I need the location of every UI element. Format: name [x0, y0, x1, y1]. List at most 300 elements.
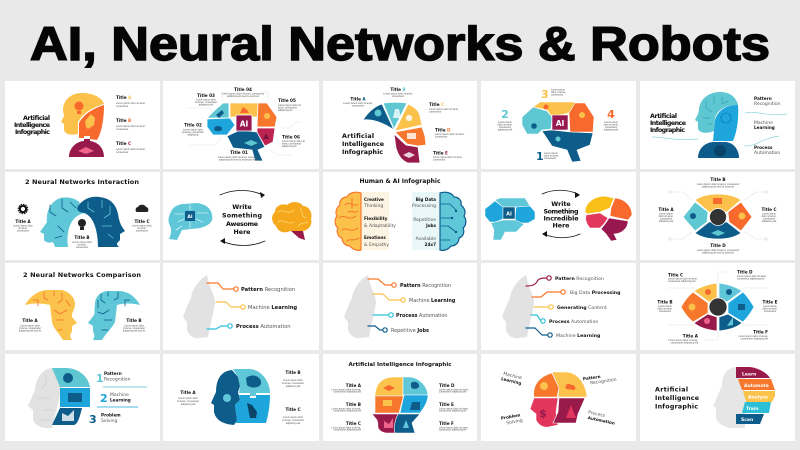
label: title B with bulb	[72, 219, 92, 249]
label: title C: consectetur	[763, 218, 775, 220]
label: title 04: adipiscing elit sed do eiusmod	[227, 95, 260, 98]
panel: four line head	[323, 263, 477, 350]
item 2	[100, 392, 131, 405]
six piece head	[372, 377, 428, 433]
label: title 01: Title 01	[230, 150, 248, 155]
cycle arrows	[220, 190, 265, 246]
label: title E: Lorem ipsum dolor sit amet,	[439, 408, 469, 410]
step 2	[497, 108, 513, 132]
head illustration	[28, 368, 90, 428]
eye diagram	[683, 194, 752, 239]
connector: machine	[526, 328, 552, 337]
label: title C: Title C	[116, 141, 131, 146]
AI chip label: AI	[240, 120, 248, 128]
heading	[14, 115, 50, 136]
label: repetitive jobs: Repetitive	[413, 217, 436, 223]
gray head	[344, 275, 376, 338]
label: title B: consectetur	[116, 128, 129, 131]
label: machine learning: Learning	[754, 125, 775, 130]
label: title A: Title A	[116, 95, 132, 100]
panel: head with three parts	[5, 81, 160, 169]
cyan head	[88, 291, 140, 340]
step 2: consectetur	[499, 126, 511, 129]
item 2: Learning	[110, 398, 131, 402]
label: emotions and empathy	[364, 235, 389, 248]
label: title A	[177, 390, 199, 406]
label: title C: dolor sit amet,	[761, 215, 777, 218]
AI chip label: AI	[506, 212, 512, 218]
panel: head with list bands	[640, 354, 795, 441]
panel: numbered head	[5, 354, 160, 441]
label: title B: Title B	[390, 87, 406, 92]
connector: machine	[373, 294, 405, 302]
label: process automation: Process Automation	[396, 313, 447, 319]
label: title E	[433, 150, 463, 162]
step 2: dolor sit amet,	[497, 124, 513, 126]
label: title F: Lorem ipsum dolor sit amet,	[738, 335, 768, 338]
label: machine learning: Learning	[501, 376, 522, 386]
label: title B	[282, 370, 304, 388]
label: title 02: sit amet, consectetur	[182, 131, 204, 134]
heading: 2 Neural Networks Comparison	[23, 271, 141, 279]
label: title 03: adipiscing elit	[199, 104, 214, 106]
center message: Write	[551, 201, 571, 208]
label: process automation	[754, 145, 780, 156]
label: title B: sit amet, consectetur	[123, 327, 145, 330]
step 3: 3	[541, 88, 549, 101]
item 2: Machine	[110, 392, 129, 398]
item 1	[96, 371, 131, 385]
label: title F: consectetur adipiscing elit	[741, 338, 768, 340]
label: title B: Title B	[346, 402, 361, 407]
label: title D	[697, 243, 739, 254]
label: problem solving: Solving	[506, 418, 523, 426]
label: title E: Title E	[763, 300, 778, 304]
label: title B	[332, 402, 361, 412]
label: title 05: Lorem ipsum dolor sit	[278, 104, 301, 107]
color segmented brain	[585, 196, 632, 241]
center message: Here	[234, 229, 250, 236]
label: title B: consectetur	[392, 95, 404, 98]
panel: four piece head with tilted labels	[481, 354, 636, 441]
step 1: consectetur	[544, 157, 557, 160]
step 1: 1	[536, 150, 544, 163]
center message	[222, 204, 262, 236]
label: title C with cloud: sit amet,	[137, 227, 147, 230]
label: big data processing: Processing	[412, 203, 436, 209]
label: pattern recognition: Pattern Recognition	[555, 276, 604, 282]
label: title 03: Lorem ipsum dolor	[196, 98, 216, 102]
label: title D: Title D	[439, 383, 455, 388]
label: title E: Title E	[433, 150, 448, 156]
item 3: 3	[89, 413, 97, 426]
label: title A	[116, 95, 146, 108]
AI segmented brain	[485, 198, 535, 240]
heading	[342, 133, 384, 156]
panel: fan head	[323, 81, 477, 169]
label: title D: Lorem ipsum dolor sit amet, consectetur	[697, 249, 739, 252]
item 2: 2	[100, 392, 108, 405]
band: learn	[736, 367, 770, 378]
band: analyze: Analyze	[748, 394, 768, 400]
heading: Artificial	[655, 386, 688, 394]
label: title F	[439, 421, 469, 432]
item 1: Pattern	[104, 371, 122, 376]
label: title 01	[218, 150, 260, 162]
label: title E	[439, 402, 469, 412]
label: process automation: Process	[754, 145, 773, 150]
label: title A: sit amet, consectetur	[19, 327, 41, 330]
label: title D	[439, 383, 469, 394]
label: title C: Title C	[285, 407, 301, 412]
label: title C: consectetur	[429, 110, 442, 114]
label: title B: consectetur	[659, 310, 671, 313]
label: title A: Title A	[180, 390, 196, 395]
label: pattern recognition: Recognition	[754, 101, 781, 107]
label: available 24x7	[416, 236, 436, 247]
step 3	[541, 88, 566, 101]
label: title C: consectetur adipiscing elit	[334, 428, 361, 432]
label: title B with bulb: Lorem ipsum dolor	[72, 241, 92, 244]
heading: 2 Neural Networks Interaction	[25, 178, 139, 186]
panel: 2 neural networks comparison	[5, 263, 160, 350]
label: title D: Lorem ipsum dolor sit amet,	[435, 133, 465, 136]
label: flexibility and adaptability: Flexibility	[364, 216, 388, 221]
label: title C with cloud: consectetur	[136, 230, 148, 232]
label: title A: Lorem ipsum dolor	[20, 324, 40, 328]
label: title 05: Title 05	[278, 98, 296, 103]
label: title D: consectetur adipiscing elit	[439, 390, 467, 394]
band: automate	[738, 379, 775, 390]
panel: write something incredible here	[481, 172, 636, 260]
label: title 04	[222, 87, 264, 98]
label: title C: Lorem ipsum dolor sit amet,	[116, 148, 146, 151]
label: process automation: Process	[588, 410, 606, 419]
label: title A: consectetur adipiscing elit	[334, 390, 361, 394]
label: title E: consectetur adipiscing elit	[439, 410, 467, 412]
label: title A: consectetur	[116, 105, 129, 108]
label: process automation: Process Automation	[549, 319, 598, 325]
connector: process	[207, 324, 232, 329]
label: pattern recognition	[754, 96, 781, 107]
puzzle head illustration	[211, 369, 270, 425]
label: title C: consectetur adipiscing elit	[668, 280, 696, 283]
label: title E	[762, 300, 778, 313]
label: title B: Title B	[285, 370, 301, 375]
label: title C: Title C	[761, 207, 777, 212]
title: AI, Neural Networks & Robots	[30, 17, 770, 70]
label: title B: adipiscing elit	[286, 385, 301, 388]
wave connectors	[652, 112, 787, 146]
label: title C: Title C	[668, 272, 683, 278]
label: title D: Title D	[737, 270, 753, 274]
label: title D: Title D	[435, 128, 451, 132]
label: title F: Lorem ipsum dolor sit amet,	[439, 426, 469, 430]
label: title A	[19, 318, 42, 332]
label: title A: adipiscing elit	[181, 403, 196, 406]
center message: Something	[222, 212, 262, 220]
label: machine learning: Machine Learning	[409, 298, 456, 304]
label: title C: Title C	[429, 102, 444, 107]
label: title B: Title B	[126, 318, 142, 323]
heading: Intelligence	[342, 141, 384, 148]
label: repetitive jobs: Jobs	[425, 223, 436, 228]
label: title C with cloud: Title C	[134, 219, 150, 224]
label: machine learning: Machine	[754, 120, 773, 126]
label: pattern recognition: Pattern	[754, 96, 772, 101]
label: title C	[668, 272, 698, 283]
connector: big data	[532, 290, 565, 297]
AI chip label: AI	[187, 214, 193, 220]
yellow head	[25, 290, 77, 340]
item 1: 1	[96, 372, 104, 385]
four piece head	[530, 372, 587, 427]
AI brain half	[440, 192, 466, 250]
label: title B: Title B	[116, 118, 131, 123]
label: machine learning	[501, 371, 523, 386]
label: title B	[383, 87, 413, 98]
label: title A with gear: Lorem ipsum dolor	[13, 224, 33, 228]
band: scan: Scan	[741, 417, 753, 423]
panel: teal head with wave lines	[640, 81, 795, 169]
panel: 2 neural networks interaction	[5, 172, 160, 260]
connector: generating	[534, 305, 553, 309]
label: title 05: amet, consectetur	[278, 106, 297, 110]
gray head	[502, 275, 534, 338]
label: title C	[282, 407, 304, 425]
panel: human and AI infographic	[323, 172, 477, 260]
eye diagram	[681, 283, 754, 331]
panel: brain with six parts	[163, 81, 319, 169]
label: machine learning: Machine Learning	[248, 305, 297, 311]
label: big data processing: Big Data Processing	[570, 290, 620, 296]
label: big data processing: Big Data	[416, 197, 436, 202]
label: title A: Lorem ipsum dolor sit amet,	[332, 388, 361, 392]
heading: Intelligence	[14, 122, 50, 129]
label: title B: Lorem ipsum dolor sit amet, consectetur	[697, 183, 739, 186]
label: title D: adipiscing elit sed do eiusmod	[702, 252, 735, 254]
label: title C: Title C	[346, 421, 361, 426]
label: emotions and empathy: Emotions	[364, 235, 386, 240]
connector: process	[373, 313, 393, 317]
item 3: Problem	[101, 412, 121, 418]
fan head illustration	[363, 102, 426, 163]
item 1: Recognition	[104, 376, 131, 382]
band: automate: Automate	[744, 383, 769, 389]
label: title B: Lorem ipsum	[658, 305, 672, 308]
two arched heads	[40, 197, 125, 247]
label: pattern recognition: Pattern Recognition	[241, 287, 295, 293]
label: title 02: adipiscing	[188, 134, 199, 136]
label: repetitive jobs: Repetitive Jobs	[391, 328, 429, 334]
label: title 03	[195, 93, 217, 106]
label: title B: Lorem ipsum dolor sit amet,	[116, 125, 146, 128]
label: process automation	[587, 410, 617, 426]
label: title A	[668, 334, 699, 344]
label: title B	[657, 300, 673, 313]
heading: Intelligence	[650, 120, 686, 127]
label: pattern recognition: Pattern Recognition	[400, 283, 451, 289]
label: available 24x7: 24x7	[425, 242, 436, 247]
center message: Here	[553, 222, 569, 230]
panel: three line head	[163, 263, 319, 350]
label: creative thinking: Creative	[364, 197, 384, 202]
label: title A: Title A	[658, 207, 674, 212]
label: title E: Title E	[439, 402, 454, 407]
step 1: Lorem ipsum	[544, 152, 558, 155]
step 4	[603, 108, 619, 132]
label: emotions and empathy: & Empathy	[364, 242, 389, 248]
band: learn: Learn	[742, 372, 756, 378]
label: title D	[435, 128, 465, 138]
label: title 05	[278, 98, 301, 112]
label: title 05: adipiscing elit	[278, 109, 293, 112]
center message: Write	[232, 204, 252, 211]
label: title B	[116, 118, 146, 131]
center message	[544, 201, 578, 230]
heading: Infographic	[655, 404, 698, 410]
label: title 06: amet, consectetur	[282, 142, 301, 146]
panel: puzzle head	[163, 354, 319, 441]
label: title A with gear: consectetur	[17, 230, 29, 232]
label: process automation: Process Automation	[236, 324, 291, 330]
yellow brain	[272, 202, 312, 240]
label: repetitive jobs	[413, 217, 436, 228]
label: pattern recognition: Pattern	[583, 374, 601, 381]
step 4: dolor sit amet,	[603, 124, 619, 126]
step 4: consectetur	[605, 126, 617, 129]
label: title F: Title F	[439, 421, 454, 426]
label: title F: Title F	[753, 330, 768, 334]
label: title 02	[182, 122, 204, 136]
head illustration	[61, 93, 104, 157]
label: title C	[761, 207, 777, 223]
heading: Intelligence	[655, 395, 699, 402]
label: title 02: Lorem ipsum dolor	[183, 128, 203, 132]
band: train: Train	[746, 406, 759, 412]
AI chip label: AI	[556, 119, 564, 128]
label: available 24x7: Available	[416, 236, 436, 242]
label: title A: dolor sit amet,	[658, 215, 674, 218]
label: title D: consectetur adipiscing elit	[737, 278, 765, 280]
head illustration	[695, 92, 739, 158]
label: title A: consectetur	[352, 104, 364, 108]
heading: Infographic	[15, 129, 50, 136]
label: title B: Title B	[657, 300, 673, 304]
label: big data processing	[412, 197, 436, 209]
label: title F	[738, 330, 768, 340]
label: title A: Lorem ipsum	[659, 212, 673, 216]
label: title C: adipiscing elit	[286, 422, 301, 425]
label: flexibility and adaptability	[364, 216, 396, 229]
cycle arrows	[542, 190, 580, 238]
label: title C: Lorem ipsum dolor sit amet,	[429, 108, 459, 111]
panel: eye with six parts	[640, 263, 795, 350]
AI brain	[168, 203, 212, 240]
label: title E: dolor sit amet,	[762, 308, 778, 310]
label: title E: consectetur	[433, 158, 446, 162]
heading: Infographic	[650, 127, 685, 134]
heading: Human & AI Infographic	[360, 178, 441, 185]
label: title C: sit amet, consectetur	[282, 419, 304, 422]
label: title C: Lorem ipsum	[762, 212, 776, 216]
label: title C	[429, 102, 459, 114]
connector: pattern	[207, 283, 238, 291]
item 3: Solving	[101, 418, 118, 424]
brain illustration	[207, 103, 277, 161]
label: title A: Title A	[346, 383, 362, 388]
step 1	[536, 150, 559, 163]
label: title C: adipiscing elit	[762, 220, 777, 223]
label: title A: adipiscing elit	[659, 220, 674, 223]
label: title A: Lorem ipsum dolor sit amet,	[116, 102, 146, 105]
heading: Infographic	[342, 149, 383, 156]
label: title A with gear: sit amet,	[18, 227, 28, 230]
label: title A: Title A	[22, 318, 38, 323]
label: title 04: Lorem ipsum dolor sit amet, consectetur	[222, 92, 264, 96]
label: title E: consectetur	[764, 310, 776, 313]
step 3: Lorem ipsum	[551, 88, 565, 92]
label: creative thinking	[363, 197, 384, 209]
label: title A: consectetur	[660, 218, 672, 220]
step 4: Lorem ipsum	[604, 121, 618, 124]
label: process automation: Automation	[754, 150, 780, 156]
label: title A with gear: Title A	[15, 219, 31, 224]
label: title A with gear	[13, 204, 33, 232]
center message: Incredible	[544, 216, 578, 222]
connector: machine	[216, 302, 245, 309]
label: title F: consectetur adipiscing elit	[439, 428, 467, 432]
label: machine learning: Machine	[503, 371, 523, 381]
label: title A: Title A	[683, 334, 699, 338]
connector: pattern	[526, 276, 551, 286]
step 4: 4	[607, 108, 615, 121]
label: title B: consectetur adipiscing elit	[334, 410, 361, 412]
label: title D: Title D	[710, 243, 726, 248]
label: title B: Lorem ipsum dolor sit amet,	[332, 408, 361, 410]
heading: Artificial	[650, 113, 677, 120]
label: title B	[123, 318, 146, 332]
heading: Artificial	[342, 133, 374, 140]
label: title B: Lorem ipsum dolor	[283, 379, 303, 382]
brain illustration	[522, 102, 594, 162]
step 3: dolor sit amet,	[551, 91, 566, 94]
label: title A: Lorem ipsum dolor sit amet,	[343, 102, 373, 105]
label: process automation: Automation	[587, 415, 615, 426]
label: generating content: Generating Content	[557, 305, 607, 311]
label: title C with cloud	[132, 205, 152, 232]
step 4: adipiscing elit	[604, 128, 619, 132]
label: title 06: Title 06	[282, 134, 300, 140]
heading	[650, 113, 686, 134]
label: title A	[658, 207, 674, 223]
label: title 01: adipiscing elit sed do eiusmod tempor	[219, 158, 259, 162]
icon: dollar: $	[539, 407, 547, 420]
label: title A	[332, 383, 362, 394]
heading	[655, 386, 699, 410]
label: title A: adipiscing elit sed do	[19, 330, 42, 332]
item 3	[89, 412, 121, 426]
label: title C: Lorem ipsum dolor sit amet,	[668, 278, 698, 280]
label: title A	[343, 96, 373, 108]
panel: numbered brain	[481, 81, 636, 169]
label: title D: Lorem ipsum dolor sit amet,	[439, 388, 469, 392]
step 2: Lorem ipsum	[498, 121, 512, 124]
label: title E: Lorem ipsum dolor sit amet,	[433, 156, 463, 159]
label: title C: Lorem ipsum dolor	[283, 416, 303, 419]
label: title 01: Lorem ipsum dolor sit amet, consectetur	[218, 156, 260, 159]
label: title E: Lorem ipsum	[763, 305, 777, 308]
